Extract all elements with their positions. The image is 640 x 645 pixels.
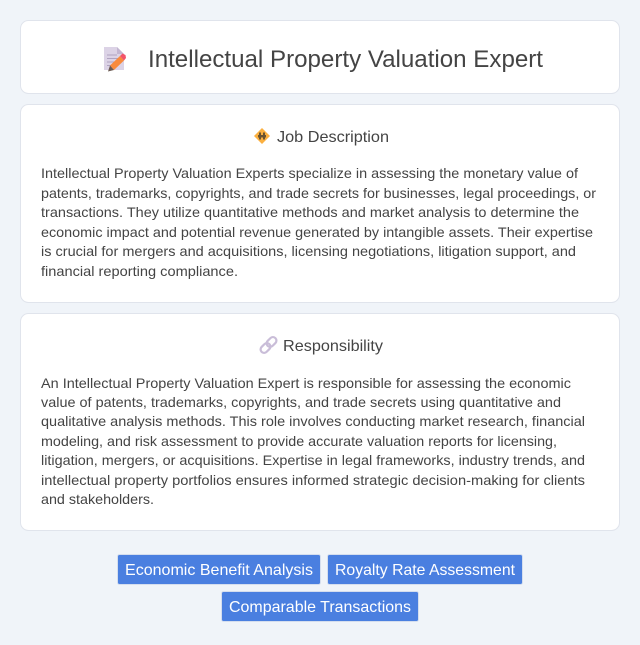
text: responsibility body: and stakeholders. <box>41 491 154 507</box>
text: job description body: patents, trademarks, copyrights, and trade secrets for businesses, legal proceedings, or <box>41 185 596 201</box>
tag: economic benefit analysis: Economic Benefit Analysis <box>125 562 313 579</box>
text: job description body: financial reporting compliance. <box>41 263 238 279</box>
heading: job description: Job Description <box>277 129 389 146</box>
tag: economic benefit analysis <box>118 554 320 584</box>
heading: responsibility: Responsibility <box>283 338 383 355</box>
tag: royalty rate assessment: Royalty Rate Assessment <box>335 562 516 579</box>
title: Intellectual Property Valuation Expert <box>148 46 543 73</box>
text: job description body: Intellectual Property Valuation Experts specialize in assessing the monetary value of <box>41 165 578 181</box>
panel: responsibility <box>20 314 620 530</box>
text: job description body: is crucial for mergers and acquisitions, licensing negotiations, litigation support, and <box>41 243 576 259</box>
text: job description body: economic impact and potential revenue generated by intangible assets. Their expertise <box>41 224 593 240</box>
text: responsibility body: qualitative analysis methods. This role involves conducting market research, financial <box>41 413 585 429</box>
text: job description body <box>41 165 596 279</box>
text: job description body: transactions. They utilize quantitative methods and market analysis to determine the <box>41 204 579 220</box>
tag: comparable transactions <box>222 592 418 622</box>
text: responsibility body: modeling, and risk assessment to provide accurate valuation reports for licensing, <box>41 433 557 449</box>
icon: document with pencil <box>104 47 126 72</box>
text: responsibility body <box>41 375 585 507</box>
text: responsibility body: intellectual property portfolios ensures informed strategic decision-making for clients <box>41 472 585 488</box>
icon: chain link <box>259 336 278 354</box>
panel: title card <box>20 20 620 94</box>
tag: comparable transactions: Comparable Transactions <box>229 599 411 616</box>
text: responsibility body: An Intellectual Property Valuation Expert is responsible for assessing the economic <box>41 375 571 391</box>
text: responsibility body: litigation, mergers, or acquisitions. Expertise in legal frameworks, industry trends, and <box>41 452 585 468</box>
icon: diamond sign <box>254 128 270 144</box>
tag: royalty rate assessment <box>328 554 522 584</box>
panel: job description <box>20 104 620 302</box>
text: responsibility body: value of patents, trademarks, copyrights, and trade secrets using quantitative and <box>41 394 561 410</box>
